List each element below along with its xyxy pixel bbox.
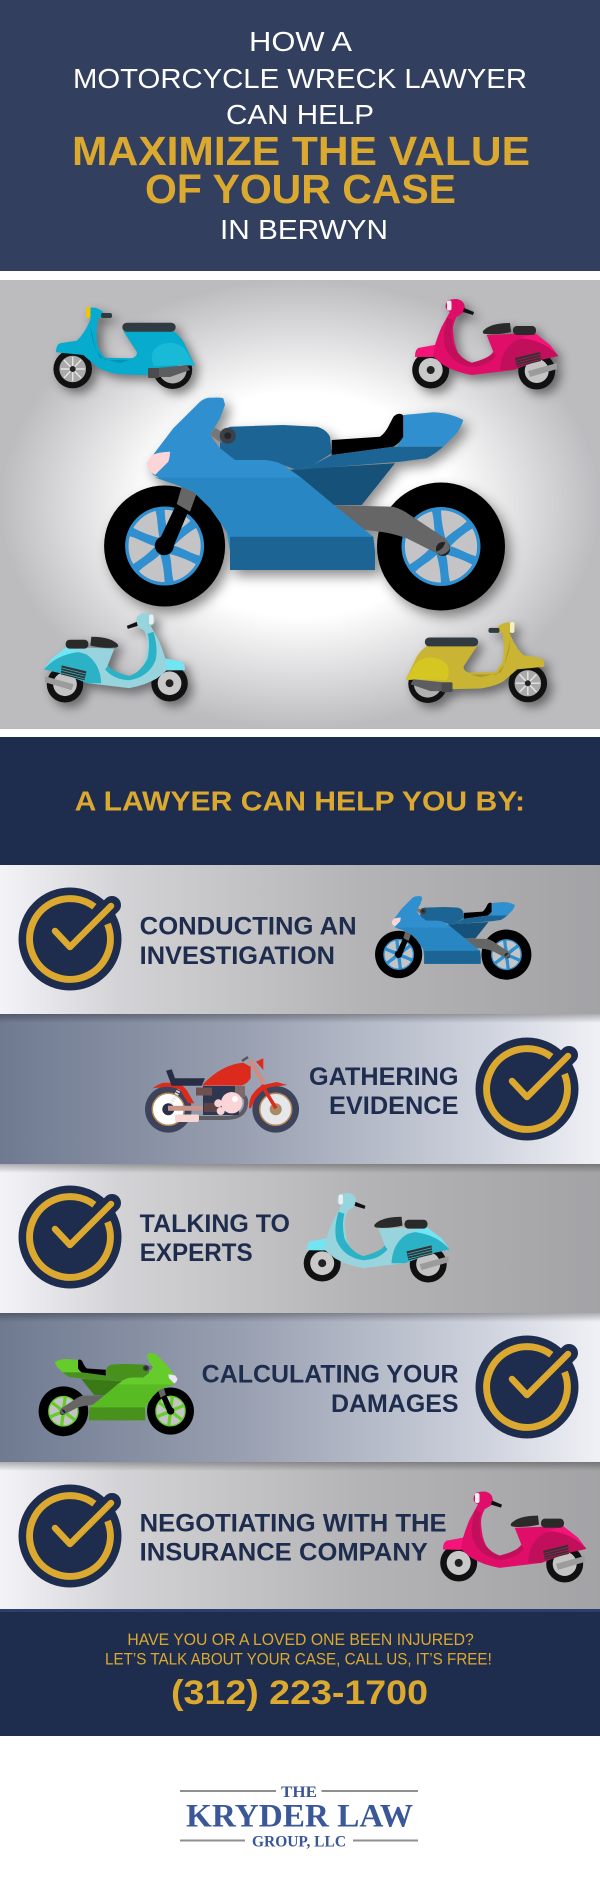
- text: injury prompt: HAVE YOU OR A LOVED ONE BEEN INJURED?: [127, 1631, 474, 1649]
- text: calculating your damages: [202, 1362, 459, 1418]
- icon: aqua scooter: [44, 613, 188, 703]
- title: CAN HELP: [226, 99, 374, 130]
- title: OF YOUR CASE: [145, 166, 456, 212]
- heading: A LAWYER CAN HELP YOU BY:: [75, 786, 525, 816]
- text: calculating your damages: DAMAGES: [331, 1391, 458, 1418]
- title: [72, 26, 530, 245]
- text: injury prompt: [105, 1631, 492, 1668]
- text: injury prompt: LET’S TALK ABOUT YOUR CASE, CALL US, IT’S FREE!: [105, 1650, 492, 1668]
- icon: blue sport motorcycle: [375, 896, 531, 980]
- text: gathering evidence: [309, 1064, 458, 1120]
- text: conducting an investigation: CONDUCTING AN: [140, 914, 357, 941]
- icon: checkmark: [474, 1036, 580, 1142]
- text: negotiating with the insurance company: NEGOTIATING WITH THE: [140, 1510, 447, 1538]
- panel: motorcycle illustration: [0, 280, 600, 729]
- text: calculating your damages: CALCULATING YOUR: [202, 1362, 459, 1389]
- icon: magenta scooter: [440, 1492, 586, 1582]
- phone number: (312) 223-1700: [171, 1674, 428, 1712]
- icon: large blue sport motorcycle: [104, 397, 505, 610]
- panel: talking to experts: [0, 1164, 600, 1313]
- panel: conducting an investigation: [0, 865, 600, 1014]
- icon: checkmark: [474, 1334, 580, 1440]
- logo: The Kryder Law Group, LLC: KRYDER LAW: [186, 1798, 413, 1834]
- icon: checkmark: [17, 1483, 123, 1589]
- icon: green sport motorcycle: [39, 1353, 194, 1436]
- icon: cyan scooter: [53, 307, 195, 389]
- panel: section heading: [0, 737, 600, 865]
- icon: magenta scooter: [412, 299, 558, 390]
- panel: title header: [0, 0, 600, 271]
- text: conducting an investigation: INVESTIGATION: [140, 943, 335, 970]
- title: IN BERWYN: [220, 214, 388, 245]
- title: MOTORCYCLE WRECK LAWYER: [73, 63, 527, 94]
- text: negotiating with the insurance company: INSURANCE COMPANY: [140, 1540, 428, 1567]
- icon: checkmark: [17, 1184, 123, 1290]
- panel: calculating your damages: [0, 1313, 600, 1462]
- text: negotiating with the insurance company: [140, 1510, 447, 1567]
- title: HOW A: [249, 26, 353, 57]
- text: gathering evidence: GATHERING: [309, 1064, 458, 1091]
- icon: aqua scooter: [304, 1193, 450, 1283]
- panel: call to action: [0, 1609, 600, 1736]
- text: conducting an investigation: [140, 914, 357, 970]
- icon: yellow scooter: [406, 622, 547, 703]
- panel: gathering evidence: [0, 1014, 600, 1164]
- text: talking to experts: EXPERTS: [140, 1240, 253, 1267]
- icon: checkmark: [17, 886, 123, 992]
- panel: negotiating with the insurance company: [0, 1462, 600, 1609]
- logo: The Kryder Law Group, LLC: GROUP, LLC: [252, 1834, 346, 1850]
- text: gathering evidence: EVIDENCE: [329, 1093, 458, 1120]
- title: MAXIMIZE THE VALUE: [72, 128, 530, 174]
- logo: The Kryder Law Group, LLC: THE: [281, 1784, 317, 1801]
- logo: The Kryder Law Group, LLC: [180, 1784, 418, 1850]
- text: talking to experts: [140, 1211, 290, 1267]
- icon: red classic motorcycle: [145, 1057, 299, 1133]
- text: talking to experts: TALKING TO: [140, 1211, 290, 1238]
